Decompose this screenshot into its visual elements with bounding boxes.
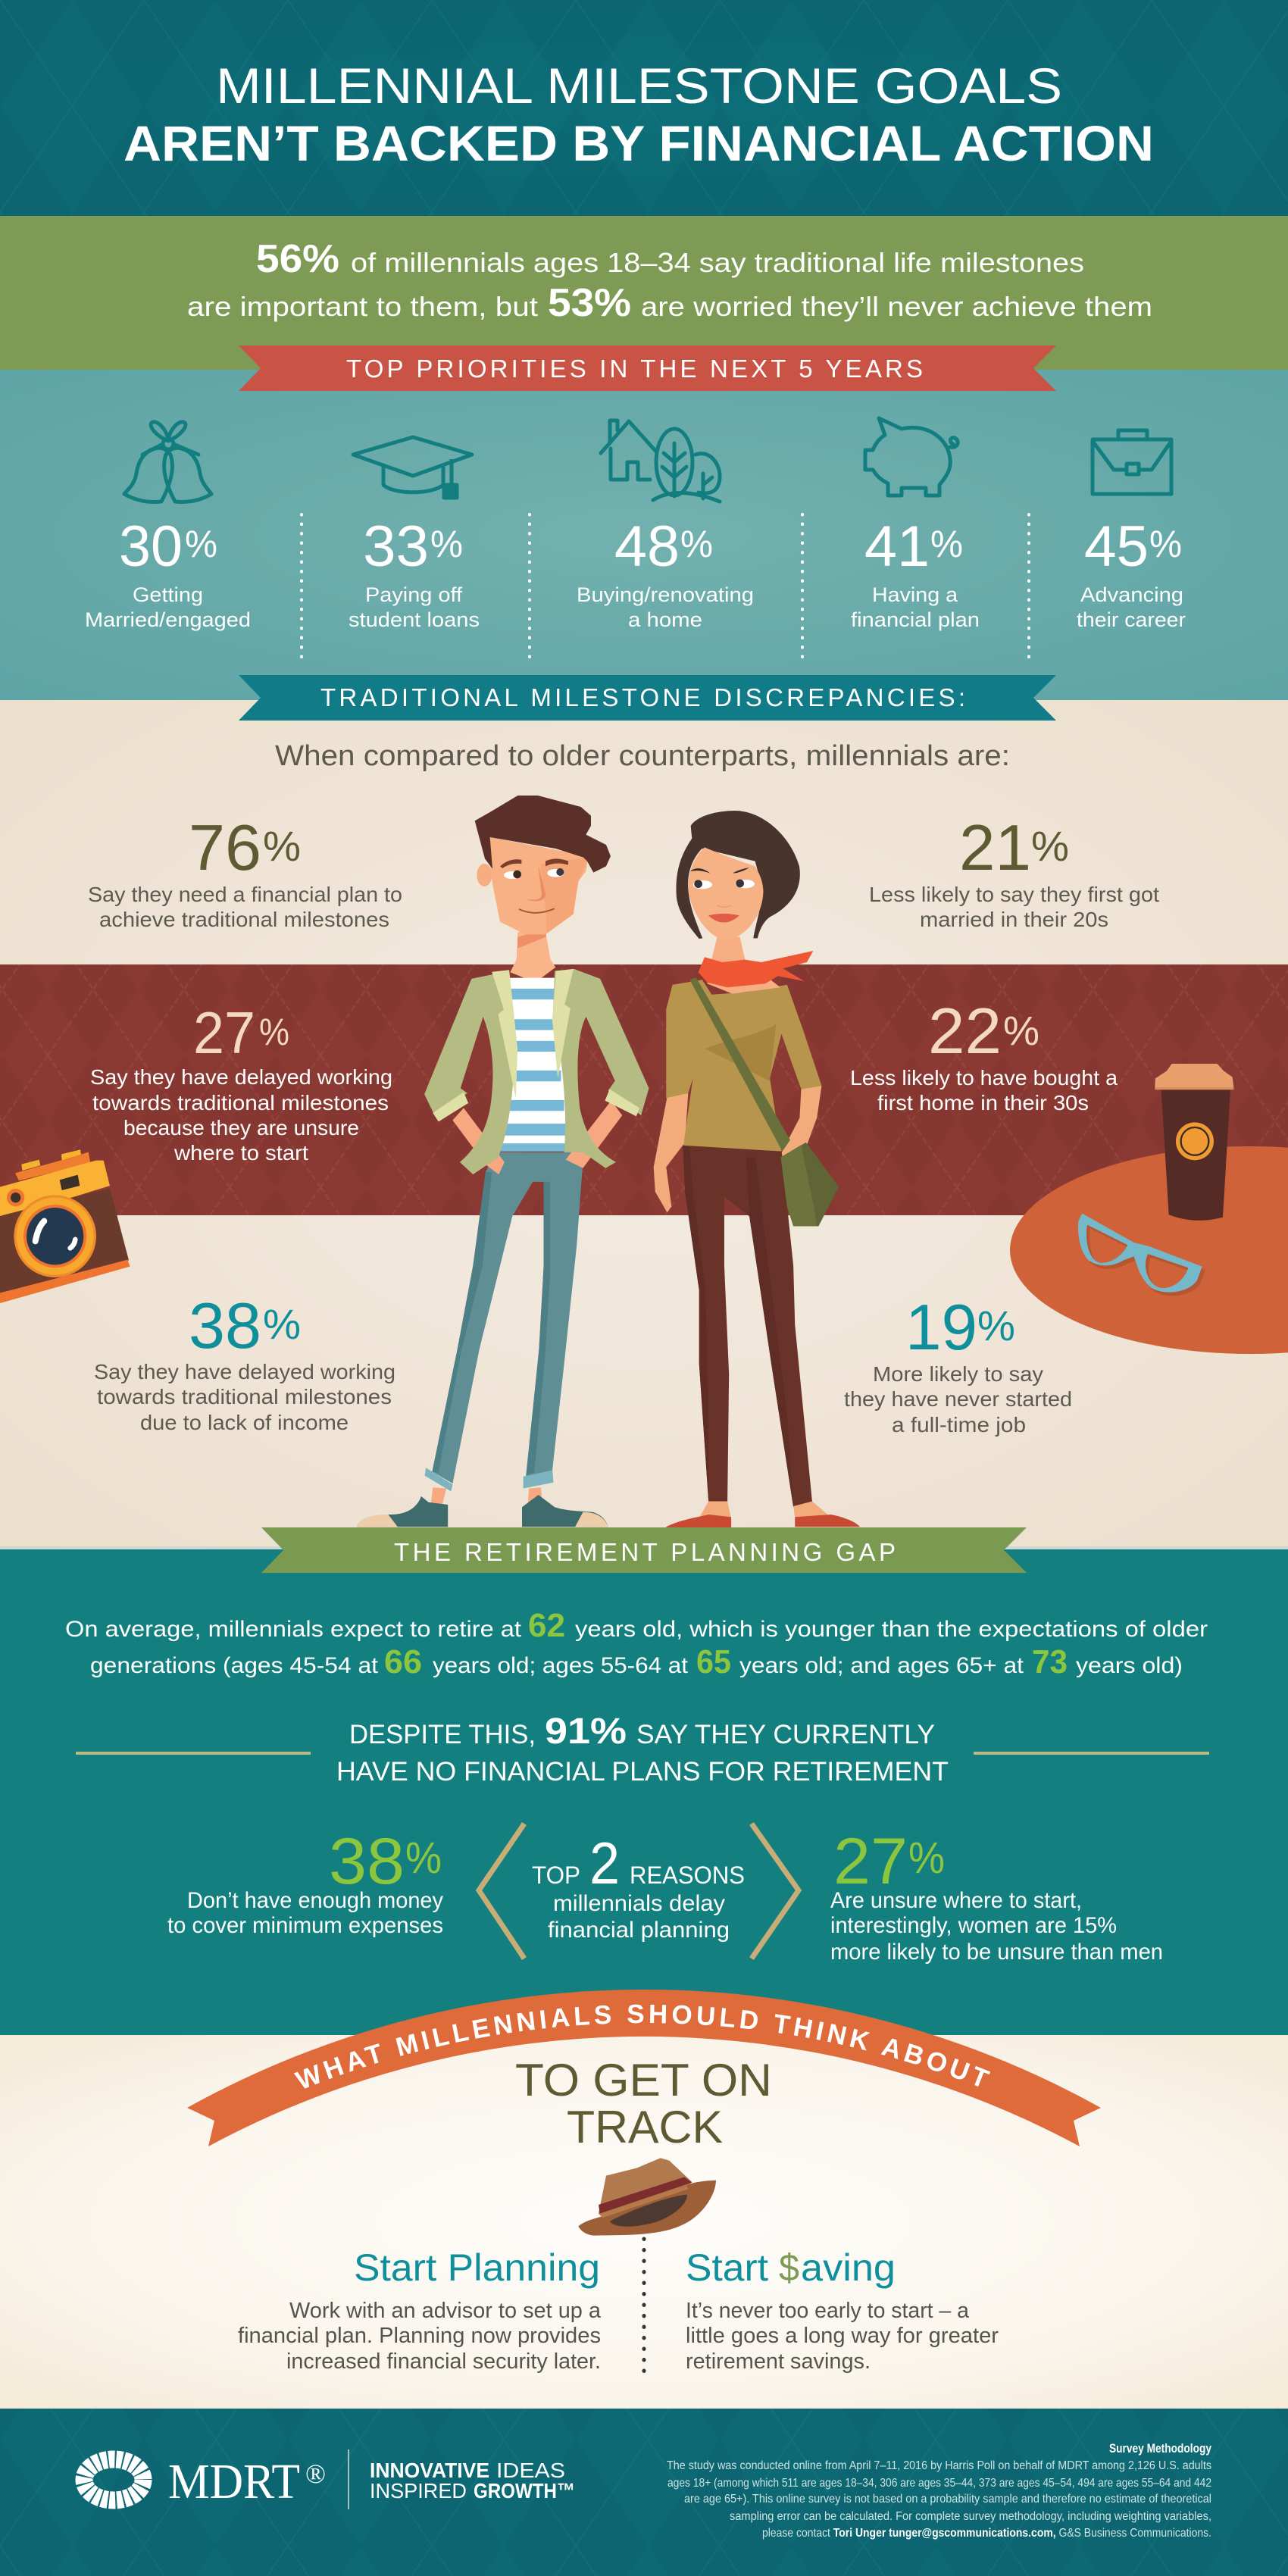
intro line 2 start: are important to them, but: [187, 291, 538, 322]
man body: [357, 969, 649, 1527]
panel: header: [0, 0, 1288, 217]
stat: 21% married in 20s: 21: [959, 812, 1031, 884]
stat: 38% not enough money: %: [405, 1834, 442, 1883]
dotted divider: [642, 2239, 646, 2373]
stat: 38% not enough money: [167, 1825, 443, 1938]
coffee cup: [1155, 1064, 1233, 1221]
stat: 48% home: 48: [614, 514, 680, 579]
banner: what millennials should think about: [187, 1990, 1101, 2146]
stat: 21% married in 20s: %: [1031, 822, 1069, 870]
retirement paragraph: years old; and ages 65+ at: [739, 1653, 1024, 1678]
illustration: hat: [578, 2158, 716, 2236]
glasses: [1078, 1214, 1205, 1296]
stat: 45% career: their career: [1077, 608, 1186, 631]
heading: to get on track: [515, 2055, 772, 2152]
retirement paragraph: years old; ages 55-64 at: [433, 1653, 689, 1678]
woman body: [654, 977, 860, 1528]
stat: 38% not enough money: to cover minimum expenses: [167, 1913, 443, 1938]
stat: 33% student loans: 33: [363, 514, 429, 579]
stat: 19% never started job: they have never started: [844, 1387, 1072, 1411]
stat: 22% first home: 22: [928, 996, 1002, 1068]
top 2 reasons: 2: [589, 1830, 620, 1896]
stat: 38% lack of income: %: [263, 1300, 301, 1348]
stat: 22% first home: first home in their 30s: [877, 1091, 1089, 1114]
stat: 33% student loans: Paying off: [365, 583, 463, 606]
man head: [475, 796, 611, 934]
stat: 30% getting married: 30: [119, 514, 183, 579]
column: start saving: $: [779, 2246, 799, 2289]
stat: 33% student loans: student loans: [349, 608, 480, 631]
stat: 27% unsure: %: [908, 1834, 945, 1883]
stat 53%: 53%: [548, 281, 631, 325]
icon: piggy bank: [865, 418, 958, 496]
subheading: compared to older counterparts: When compared to older counterparts, millennials are:: [275, 740, 1010, 772]
column: start saving: retirement savings.: [686, 2349, 871, 2374]
stat: 38% not enough money: Don’t have enough money: [187, 1888, 443, 1913]
icon: right chevron: [752, 1824, 799, 1959]
stat: 22% first home: %: [1003, 1008, 1039, 1054]
retirement paragraph: 65: [696, 1643, 731, 1680]
stat: 41% financial plan: Having a: [872, 583, 958, 606]
column: start saving: Start: [686, 2246, 768, 2289]
icon: wedding bells: [124, 422, 211, 502]
top 2 reasons: millennials delay: [553, 1891, 725, 1916]
stat: 41% financial plan: 41: [864, 514, 930, 579]
top 2 reasons: financial planning: [548, 1918, 730, 1943]
stat: 27% unsure where to start: because they are unsure: [123, 1116, 359, 1140]
tagline: INSPIRED: [370, 2479, 467, 2503]
stat: 48% home: a home: [628, 608, 702, 631]
icon: graduation cap: [353, 437, 472, 498]
stat: 19% never started job: [844, 1292, 1072, 1436]
heading: to get on track: TRACK: [567, 2102, 723, 2152]
stat: 19% never started job: 19: [905, 1292, 977, 1364]
stat: 27% unsure where to start: towards traditional milestones: [92, 1091, 389, 1114]
icon: briefcase: [1093, 430, 1171, 494]
stat: 33% student loans: %: [430, 523, 463, 565]
tagline: INNOVATIVE: [370, 2459, 489, 2482]
stat: 22% first home: [850, 996, 1118, 1114]
banner: what millennials should think about: WHAT MILLENNIALS SHOULD THINK ABOUT: [294, 2005, 991, 2089]
stat: 76% need plan: [88, 812, 402, 931]
stat: 38% lack of income: Say they have delayed working: [94, 1360, 395, 1383]
survey methodology: Survey Methodology: [1109, 2441, 1211, 2456]
column: start planning: Work with an advisor to set up a: [289, 2299, 602, 2323]
stat: 30% getting married: [85, 514, 251, 631]
retirement paragraph: [65, 1607, 1208, 1680]
column: start saving: [686, 2246, 999, 2374]
logo: MDRT ring: [84, 2459, 143, 2500]
stat: 76% need plan: Say they need a financial plan to: [88, 883, 402, 906]
panel: intro statement: [0, 216, 1288, 370]
callout: 91% have no plans: 91%: [545, 1712, 627, 1752]
column: start planning: increased financial security later.: [286, 2349, 601, 2374]
stat: 38% lack of income: [94, 1290, 395, 1434]
ribbon: retirement planning gap: [261, 1527, 1027, 1573]
stat: 45% career: Advancing: [1080, 583, 1183, 606]
retirement paragraph: 66: [384, 1643, 422, 1680]
table: [1010, 1146, 1288, 1354]
stat: 76% need plan: %: [263, 822, 301, 870]
column: start planning: [238, 2246, 602, 2374]
stat: 27% unsure where to start: Say they have delayed working: [90, 1065, 392, 1089]
stat: 21% married in 20s: married in their 20s: [920, 908, 1108, 931]
stat: 27% unsure: [830, 1825, 1163, 1965]
survey methodology: are age 65+). This online survey is not based on a probability sample and therefore no estimate of theoretical: [684, 2493, 1211, 2506]
stat: 19% never started job: %: [977, 1302, 1015, 1349]
callout: 91% have no plans: [76, 1712, 1209, 1787]
callout: 91% have no plans: DESPITE THIS,: [349, 1720, 536, 1749]
column: start planning: financial plan. Planning now provides: [238, 2324, 601, 2348]
stat: 30% getting married: Getting: [133, 583, 203, 606]
survey methodology: please contact Tori Unger tunger@gscommunications.com, G&S Business Communications.: [762, 2527, 1211, 2540]
retirement paragraph: years old, which is younger than the expectations of older: [575, 1617, 1208, 1642]
stat: 41% financial plan: %: [930, 523, 963, 565]
survey methodology: ages 18+ (among which 511 are ages 18–34, 306 are ages 35–44, 373 are ages 45–54, 494 are ages 55–64 and 442: [667, 2477, 1211, 2490]
intro line 1: of millennials ages 18–34 say traditional life milestones: [351, 247, 1084, 278]
stat: 27% unsure: 27: [833, 1825, 908, 1898]
logo: MDRT wordmark: ®: [305, 2459, 326, 2489]
stat: 30% getting married: Married/engaged: [85, 608, 251, 631]
panel: top priorities: [0, 370, 1288, 701]
stat: 38% not enough money: 38: [329, 1825, 405, 1898]
stat: 45% career: %: [1149, 523, 1182, 565]
column: start saving: aving: [801, 2246, 896, 2289]
retirement paragraph: generations (ages 45-54 at: [90, 1653, 379, 1678]
icon: house and trees: [601, 420, 720, 502]
ribbon: top priorities: TOP PRIORITIES IN THE NEXT 5 YEARS: [346, 355, 923, 383]
intro line 2 end: are worried they’ll never achieve them: [641, 291, 1152, 322]
logo: MDRT wordmark: MDRT: [168, 2454, 300, 2509]
panel: footer: [0, 2409, 1288, 2576]
tagline: IDEAS: [496, 2459, 565, 2482]
tagline: GROWTH™: [474, 2479, 575, 2503]
stat 56%: 56%: [256, 237, 339, 281]
stat: 27% unsure where to start: 27: [193, 999, 255, 1066]
stat: 76% need plan: 76: [189, 812, 261, 884]
panel: get on track: [0, 2035, 1288, 2409]
stat: 45% career: [1077, 514, 1186, 631]
callout: 91% have no plans: SAY THEY CURRENTLY: [636, 1720, 935, 1749]
illustration: camera: [0, 1149, 130, 1303]
survey methodology: [667, 2441, 1211, 2540]
title line 2: AREN’T BACKED BY FINANCIAL ACTION: [123, 115, 1154, 171]
retirement paragraph: On average, millennials expect to retire at: [65, 1617, 522, 1642]
title line 1: MILLENNIAL MILESTONE GOALS: [216, 58, 1062, 114]
column: start planning: Start Planning: [354, 2246, 600, 2289]
heading: to get on track: TO GET ON: [515, 2055, 772, 2106]
ribbon: traditional milestone discrepancies: TRADITIONAL MILESTONE DISCREPANCIES:: [320, 683, 965, 711]
stat: 38% lack of income: 38: [189, 1290, 261, 1362]
top 2 reasons: [532, 1830, 745, 1943]
panel: milestone discrepancies background: [0, 700, 1288, 1549]
survey methodology: sampling error can be calculated. For complete survey methodology, including weighting variables,: [730, 2510, 1211, 2523]
stat: 48% home: [577, 514, 754, 631]
survey methodology: The study was conducted online from April 7–11, 2016 by Harris Poll on behalf of MDRT among 2,126 U.S. adults: [667, 2459, 1211, 2472]
stat: 48% home: %: [680, 523, 713, 565]
panel: retirement planning gap: [0, 1549, 1288, 2035]
ribbon: top priorities: [239, 345, 1056, 391]
stat: 27% unsure: Are unsure where to start,: [830, 1888, 1082, 1913]
stat: 76% need plan: achieve traditional milestones: [99, 908, 389, 931]
stat: 19% never started job: a full-time job: [892, 1413, 1026, 1436]
illustration: table, coffee and glasses: [1010, 1064, 1288, 1354]
stat: 48% home: Buying/renovating: [577, 583, 754, 606]
illustration: woman: [654, 811, 860, 1528]
retirement paragraph: years old): [1076, 1653, 1183, 1678]
stat: 21% married in 20s: [869, 812, 1159, 931]
ribbon: traditional milestone discrepancies: [239, 675, 1056, 721]
stat: 38% lack of income: due to lack of income: [140, 1411, 349, 1434]
column: start saving: little goes a long way for greater: [686, 2324, 999, 2348]
stat: 30% getting married: %: [185, 523, 217, 565]
illustration: man: [357, 796, 649, 1527]
top 2 reasons: REASONS: [630, 1862, 745, 1889]
stat: 27% unsure: more likely to be unsure than men: [830, 1940, 1163, 1965]
stat: 41% financial plan: financial plan: [851, 608, 980, 631]
stat: 21% married in 20s: Less likely to say they first got: [869, 883, 1159, 906]
retirement paragraph: 62: [528, 1607, 565, 1644]
stat: 27% unsure: interestingly, women are 15%: [830, 1913, 1117, 1938]
stat: 33% student loans: [349, 514, 480, 631]
top 2 reasons: TOP: [532, 1862, 580, 1889]
ribbon: retirement planning gap: THE RETIREMENT PLANNING GAP: [394, 1538, 896, 1566]
stat: 27% unsure where to start: where to start: [174, 1141, 308, 1165]
retirement paragraph: 73: [1032, 1643, 1068, 1680]
icon: left chevron: [479, 1824, 524, 1959]
stat: 19% never started job: More likely to say: [873, 1362, 1043, 1386]
stat: 22% first home: Less likely to have bought a: [850, 1066, 1118, 1089]
stat: 41% financial plan: [851, 514, 980, 631]
man neck: [510, 930, 555, 983]
stat: 27% unsure where to start: [90, 999, 392, 1165]
stat: 27% unsure where to start: %: [259, 1011, 289, 1053]
stat: 45% career: 45: [1084, 514, 1149, 579]
woman head: [676, 811, 813, 994]
tagline: [370, 2459, 575, 2503]
stat: 38% lack of income: towards traditional milestones: [97, 1385, 392, 1408]
column: start saving: It’s never too early to start – a: [686, 2299, 970, 2323]
callout: 91% have no plans: HAVE NO FINANCIAL PLANS FOR RETIREMENT: [336, 1757, 949, 1787]
